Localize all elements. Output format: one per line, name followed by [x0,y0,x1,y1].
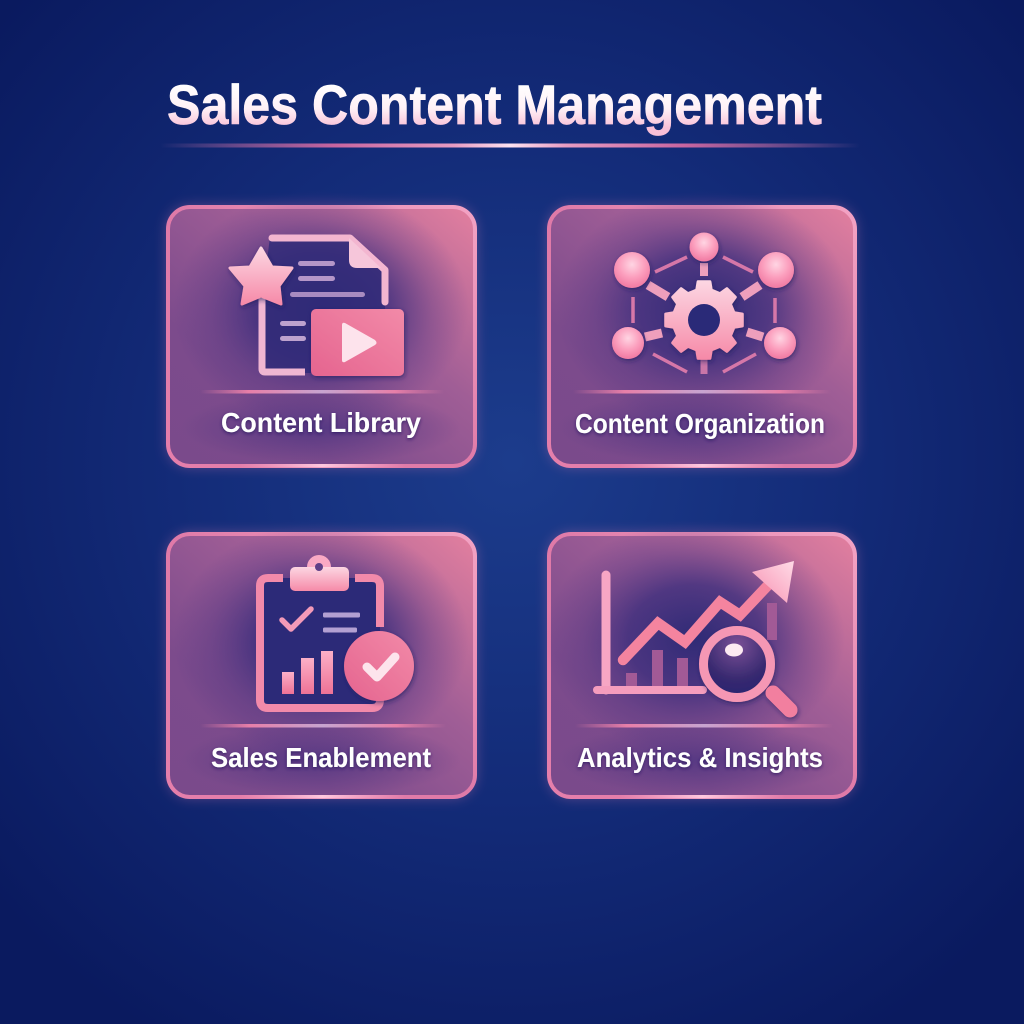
divider [200,724,446,728]
icon: clipboard [260,555,414,708]
icon: gear [666,282,742,358]
icon: clipboard clip [290,555,349,591]
panel: content library [166,190,477,468]
label: Content Library [221,407,421,438]
divider [575,724,833,728]
icon: trend arrow [623,561,794,660]
divider [200,390,444,394]
icon: gear network [612,232,796,374]
icon: magnifying glass [704,630,790,710]
panel: analytics and insights [545,520,857,799]
label: Analytics & Insights [577,742,823,773]
icon: star [230,248,292,304]
title: Sales Content Management [167,73,822,136]
label: Content Organization [575,408,825,439]
title underline [160,144,860,148]
icon: play triangle [342,323,376,362]
divider [573,390,831,394]
icon: growth chart with magnifier [597,561,794,710]
panel: content organization [547,190,857,468]
icon: document with star and video [230,237,404,376]
icon: network nodes [612,232,796,359]
panel: sales enablement [166,522,477,799]
icon: check badge [344,631,414,701]
label: Sales Enablement [211,742,431,773]
icon: video player [311,309,404,376]
chart: clipboard bars [282,651,333,694]
